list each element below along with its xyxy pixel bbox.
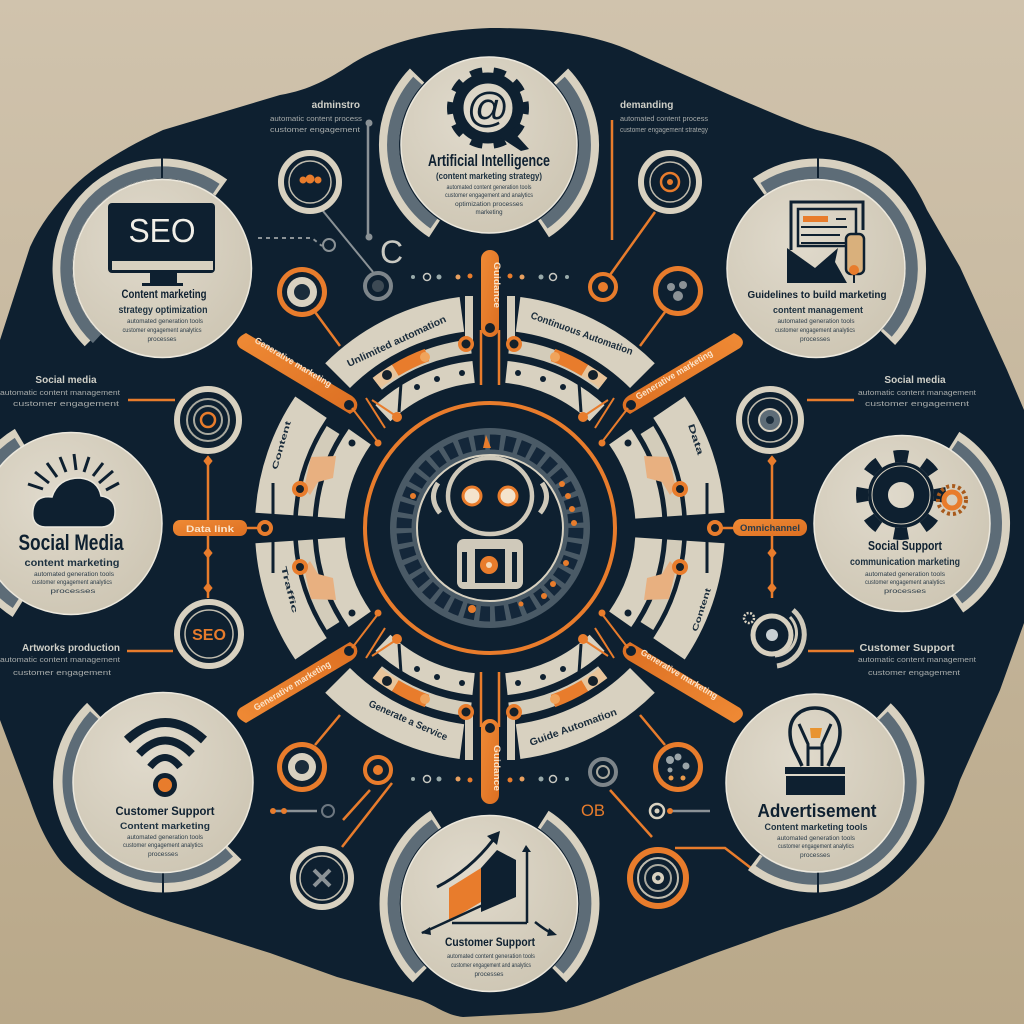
panel: advertisement: processes <box>800 853 830 859</box>
ring band labels: Data <box>686 423 706 458</box>
small label: right lower: customer engagement <box>868 670 960 677</box>
node: bottom left large <box>293 849 351 907</box>
icon: gears <box>862 456 966 534</box>
small label: right upper: automatic content management <box>858 390 976 397</box>
ring band labels: Content <box>690 587 713 633</box>
small label: right upper <box>858 375 976 408</box>
icon: cloud with rays <box>28 454 119 527</box>
panel: social support <box>814 436 1000 612</box>
horizontal tag: right <box>707 519 807 536</box>
panel: artificial intelligence: (content marketing strategy) <box>436 171 542 181</box>
node: orange lower left <box>277 742 327 792</box>
node: SEO <box>177 602 241 666</box>
small label: right upper: customer engagement <box>865 401 969 408</box>
segmented ring: top-left quadrant <box>237 274 474 518</box>
panel: customer support wifi: Customer Support <box>116 804 214 818</box>
icon: light bulb <box>785 708 845 795</box>
panel: advertisement: customer engagement analytics <box>778 844 854 850</box>
vertical tag: top: Guidance <box>492 262 502 308</box>
horizontal tag: right: Omnichannel <box>740 523 800 533</box>
panel: SEO: Content marketing <box>122 287 206 301</box>
panel: customer support wifi: processes <box>148 852 178 858</box>
small label: left upper: Social media <box>35 375 97 386</box>
vertical tag: bottom <box>481 719 502 804</box>
small label: top left: automatic content process <box>270 116 363 123</box>
vertical tag: bottom: Guidance <box>492 745 502 791</box>
horizontal tag: left <box>173 520 273 536</box>
small label: left lower: Artworks production <box>22 643 120 654</box>
panel: artificial intelligence: customer engagement and analytics <box>445 193 533 199</box>
node: mid left upper <box>177 389 239 451</box>
panel: artificial intelligence: optimization processes <box>455 202 523 208</box>
robot ears <box>433 483 547 513</box>
panel: customer support wifi: automated generation tools <box>127 835 203 841</box>
panel: social media <box>0 432 162 614</box>
small label: top right: automated content process <box>620 116 709 123</box>
small label: top left: customer engagement <box>270 127 360 134</box>
ring band labels: Traffic <box>279 565 300 615</box>
panel: SEO: SEO <box>128 212 196 249</box>
small label: left lower <box>0 643 120 677</box>
panel: advertisement: Content marketing tools <box>764 822 868 832</box>
panel: advertisement: Advertisement <box>758 801 877 821</box>
panel: customer support chart <box>390 816 589 992</box>
ring band labels: Guide Automation <box>528 707 618 749</box>
small label: right lower: Customer Support <box>860 643 955 654</box>
panel: social media: content marketing <box>24 558 120 569</box>
small label: left lower: automatic content management <box>0 657 120 664</box>
small label: left upper <box>0 375 120 408</box>
panel: social support: processes <box>884 589 926 595</box>
panel: SEO: processes <box>148 337 176 343</box>
node: mid right upper <box>739 389 801 451</box>
panel: social support: customer engagement analytics <box>865 580 945 586</box>
robot head <box>448 458 532 534</box>
ring band labels: Continuous Automation <box>529 310 634 358</box>
small label: top right: customer engagement strategy <box>620 127 708 134</box>
central robot hub <box>365 403 615 653</box>
panel: advertisement: automated generation tools <box>777 836 855 842</box>
panel: customer support chart: Customer Support <box>445 935 535 949</box>
panel: artificial intelligence <box>389 57 589 233</box>
small label: top left: adminstro <box>312 100 360 111</box>
icon: envelope and document <box>787 202 864 283</box>
ring band labels: Generate a Service <box>367 699 449 743</box>
panel: social support: Social Support <box>868 538 943 553</box>
orange diagonal tags: Generative marketing <box>253 335 334 389</box>
letter C mark: C <box>380 234 403 270</box>
panel: SEO: automated generation tools <box>127 319 203 325</box>
orange diagonal tags: Generative marketing <box>634 348 714 402</box>
node: gray small top <box>365 273 391 299</box>
node: gear lower right <box>744 610 804 666</box>
panel: content strategy: automated generation tools <box>778 319 854 325</box>
small label: right upper: Social media <box>884 375 946 386</box>
segmented ring: bottom-left quadrant <box>237 538 474 782</box>
panel: content strategy: customer engagement analytics <box>775 328 855 334</box>
small label: left lower: customer engagement <box>13 670 111 677</box>
panel: content strategy: Guidelines to build marketing <box>748 290 886 301</box>
icon: monitor <box>108 203 215 286</box>
panel: customer support chart: automated content generation tools <box>447 954 535 960</box>
robot body <box>457 539 523 589</box>
orange diagonal tags: Generative marketing <box>252 659 332 713</box>
panel: content strategy: processes <box>800 337 830 343</box>
panel: content strategy <box>727 157 916 358</box>
vertical tag: top <box>481 250 502 337</box>
small label: top left <box>270 100 363 134</box>
connector lines <box>127 120 854 875</box>
panel: content strategy: content management <box>773 305 863 315</box>
panel: customer support wifi: Content marketing <box>120 821 210 831</box>
small label: top right: demanding <box>620 100 673 111</box>
ring band labels <box>270 310 713 749</box>
panel: customer support chart: processes <box>474 972 504 978</box>
small label: right lower <box>858 643 976 677</box>
small label: left upper: automatic content management <box>0 390 120 397</box>
letters OB mark: OB <box>581 801 605 820</box>
panel: social media: processes <box>50 589 96 595</box>
panel: customer support wifi: customer engagement analytics <box>123 843 203 849</box>
small label: top right <box>620 100 709 134</box>
icon: growth chart <box>421 831 557 936</box>
panel: customer support wifi <box>63 692 253 895</box>
panel: social media: customer engagement analytics <box>32 580 112 586</box>
node: bottom right large <box>630 850 686 906</box>
icon: gear with at-sign <box>451 71 529 151</box>
panel: advertisement <box>726 694 914 896</box>
panel: artificial intelligence: marketing <box>476 210 502 216</box>
robot eyes <box>463 487 517 505</box>
panel: artificial intelligence: automated content generation tools <box>446 185 532 191</box>
small label: left upper: customer engagement <box>13 401 119 408</box>
orange diagonal tags <box>252 335 720 713</box>
node: top right large <box>641 153 699 211</box>
panel: SEO: customer engagement analytics <box>122 328 202 334</box>
orange diagonal tags: Generative marketing <box>639 647 720 701</box>
panel: social media: automated generation tools <box>34 572 114 578</box>
node: SEO: SEO <box>192 627 226 644</box>
node: orange lower right <box>653 742 703 792</box>
segmented ring: top-right quadrant <box>506 274 743 518</box>
ring band labels: Content <box>270 419 293 471</box>
panel: social support: automated generation tools <box>865 572 945 578</box>
panel: SEO: strategy optimization <box>118 305 208 316</box>
panel: social media: Social Media <box>18 530 124 555</box>
node: orange small lower <box>365 757 391 783</box>
panel: SEO <box>63 157 252 358</box>
segmented ring: bottom-right quadrant <box>506 538 743 782</box>
panel: social support: communication marketing <box>850 557 960 568</box>
icon: wifi signal <box>127 722 204 797</box>
horizontal tag: left: Data link <box>186 524 235 534</box>
node: gray small lower <box>590 759 616 785</box>
node: orange upper right <box>653 266 703 316</box>
small label: right lower: automatic content management <box>858 657 976 664</box>
panel: artificial intelligence: Artificial Intelligence <box>428 151 550 170</box>
ring band labels: Unlimited automation <box>346 314 448 370</box>
node: orange upper left <box>277 267 327 317</box>
node: orange small top <box>590 274 616 300</box>
icon: gear with at-sign: @ <box>467 84 509 131</box>
node: top left large <box>281 153 339 211</box>
panel: customer support chart: customer engagement and analytics <box>451 963 531 969</box>
